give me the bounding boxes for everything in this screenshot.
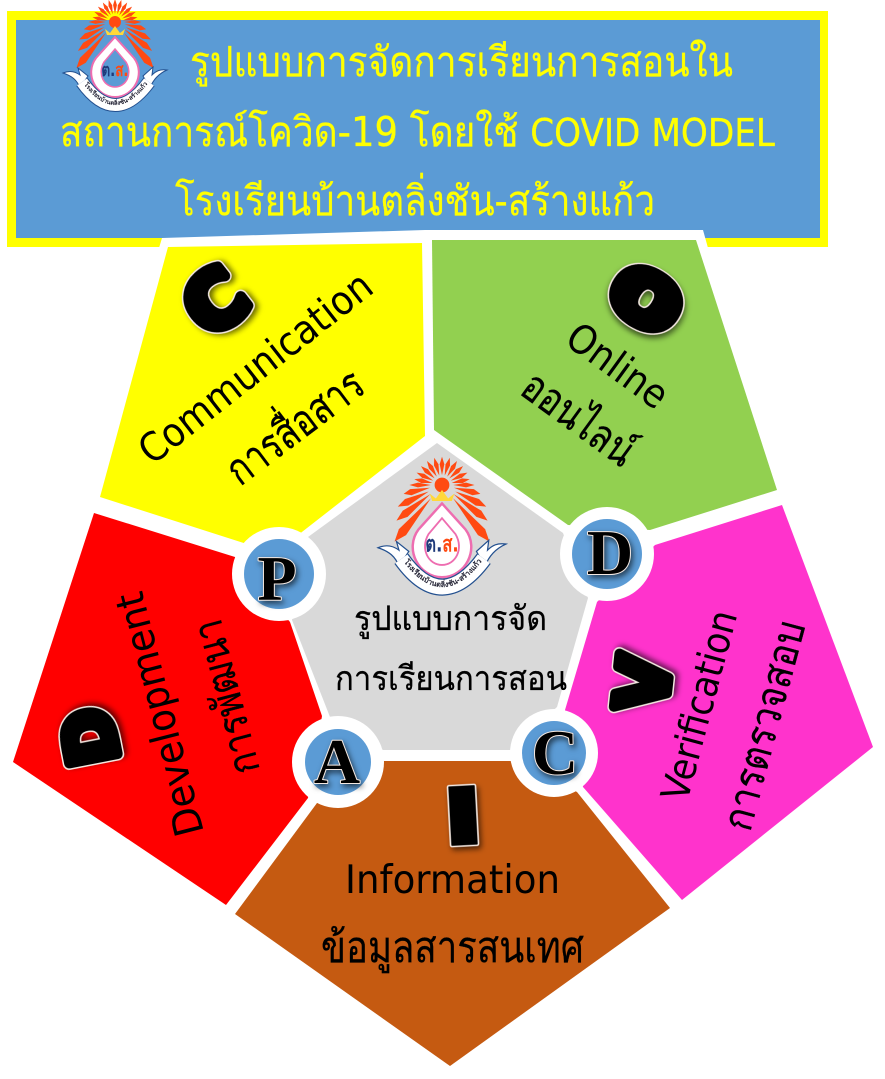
logo: center bbox=[376, 456, 508, 596]
badge: D: D bbox=[587, 517, 633, 588]
label: Information: Information bbox=[345, 858, 560, 903]
letter C: C bbox=[166, 249, 265, 354]
label: Verification: Verification bbox=[653, 606, 747, 806]
label: Communication: Communication bbox=[130, 263, 382, 474]
label: การพัฒนา: การพัฒนา bbox=[182, 615, 270, 780]
badge: C bbox=[510, 709, 598, 797]
badge: A bbox=[292, 716, 384, 808]
badge: P: P bbox=[257, 543, 297, 614]
letter D: D bbox=[47, 701, 136, 772]
title text: สถานการณ์โควิด-19 โดยใช้ COVID MODEL bbox=[60, 108, 775, 156]
panel: communication bbox=[100, 243, 425, 553]
title text bbox=[60, 38, 775, 225]
letter O: O bbox=[596, 250, 694, 351]
header panel bbox=[7, 11, 828, 248]
logo: center: ต.ส. bbox=[425, 531, 459, 557]
label: Development: Development bbox=[107, 587, 214, 841]
badge: P bbox=[232, 527, 326, 621]
title text: โรงเรียนบ้านตลิ่งชัน-สร้างแก้ว bbox=[175, 173, 655, 225]
letter I: I bbox=[449, 777, 477, 856]
label: การตรวจสอบ: การตรวจสอบ bbox=[712, 615, 815, 836]
logo: header: ต.ส. bbox=[102, 60, 128, 81]
label: การสื่อสาร: การสื่อสาร bbox=[212, 354, 374, 496]
panel: information bbox=[235, 761, 670, 1066]
label: Online: Online bbox=[557, 314, 677, 419]
badge: D bbox=[560, 507, 654, 601]
letter C: C bbox=[166, 249, 265, 354]
letter O: O bbox=[596, 250, 694, 351]
letter D: D bbox=[47, 701, 136, 772]
letter V: V bbox=[600, 652, 688, 714]
label: ข้อมูลสารสนเทศ: ข้อมูลสารสนเทศ bbox=[321, 923, 584, 974]
badge: A: A bbox=[314, 726, 360, 797]
logo: header: โรงเรียนบ้านตลิ่งชัน-สร้างแก้ว bbox=[85, 82, 148, 106]
panel: online bbox=[432, 240, 777, 530]
center text bbox=[335, 599, 567, 699]
logo: center: โรงเรียนบ้านตลิ่งชัน-สร้างแก้ว bbox=[405, 558, 482, 588]
label: ออนไลน์: ออนไลน์ bbox=[512, 361, 645, 477]
panel: development bbox=[13, 513, 322, 905]
letter V: V bbox=[600, 652, 688, 714]
center text: รูปแบบการจัด bbox=[354, 599, 547, 639]
panel: center pentagon bbox=[292, 443, 588, 750]
title text: รูปแบบการจัดการเรียนการสอนใน bbox=[190, 38, 733, 87]
logo: header bbox=[62, 0, 168, 112]
badge: C: C bbox=[532, 717, 578, 788]
panel: verification bbox=[565, 505, 873, 900]
center text: การเรียนการสอน bbox=[335, 659, 567, 699]
